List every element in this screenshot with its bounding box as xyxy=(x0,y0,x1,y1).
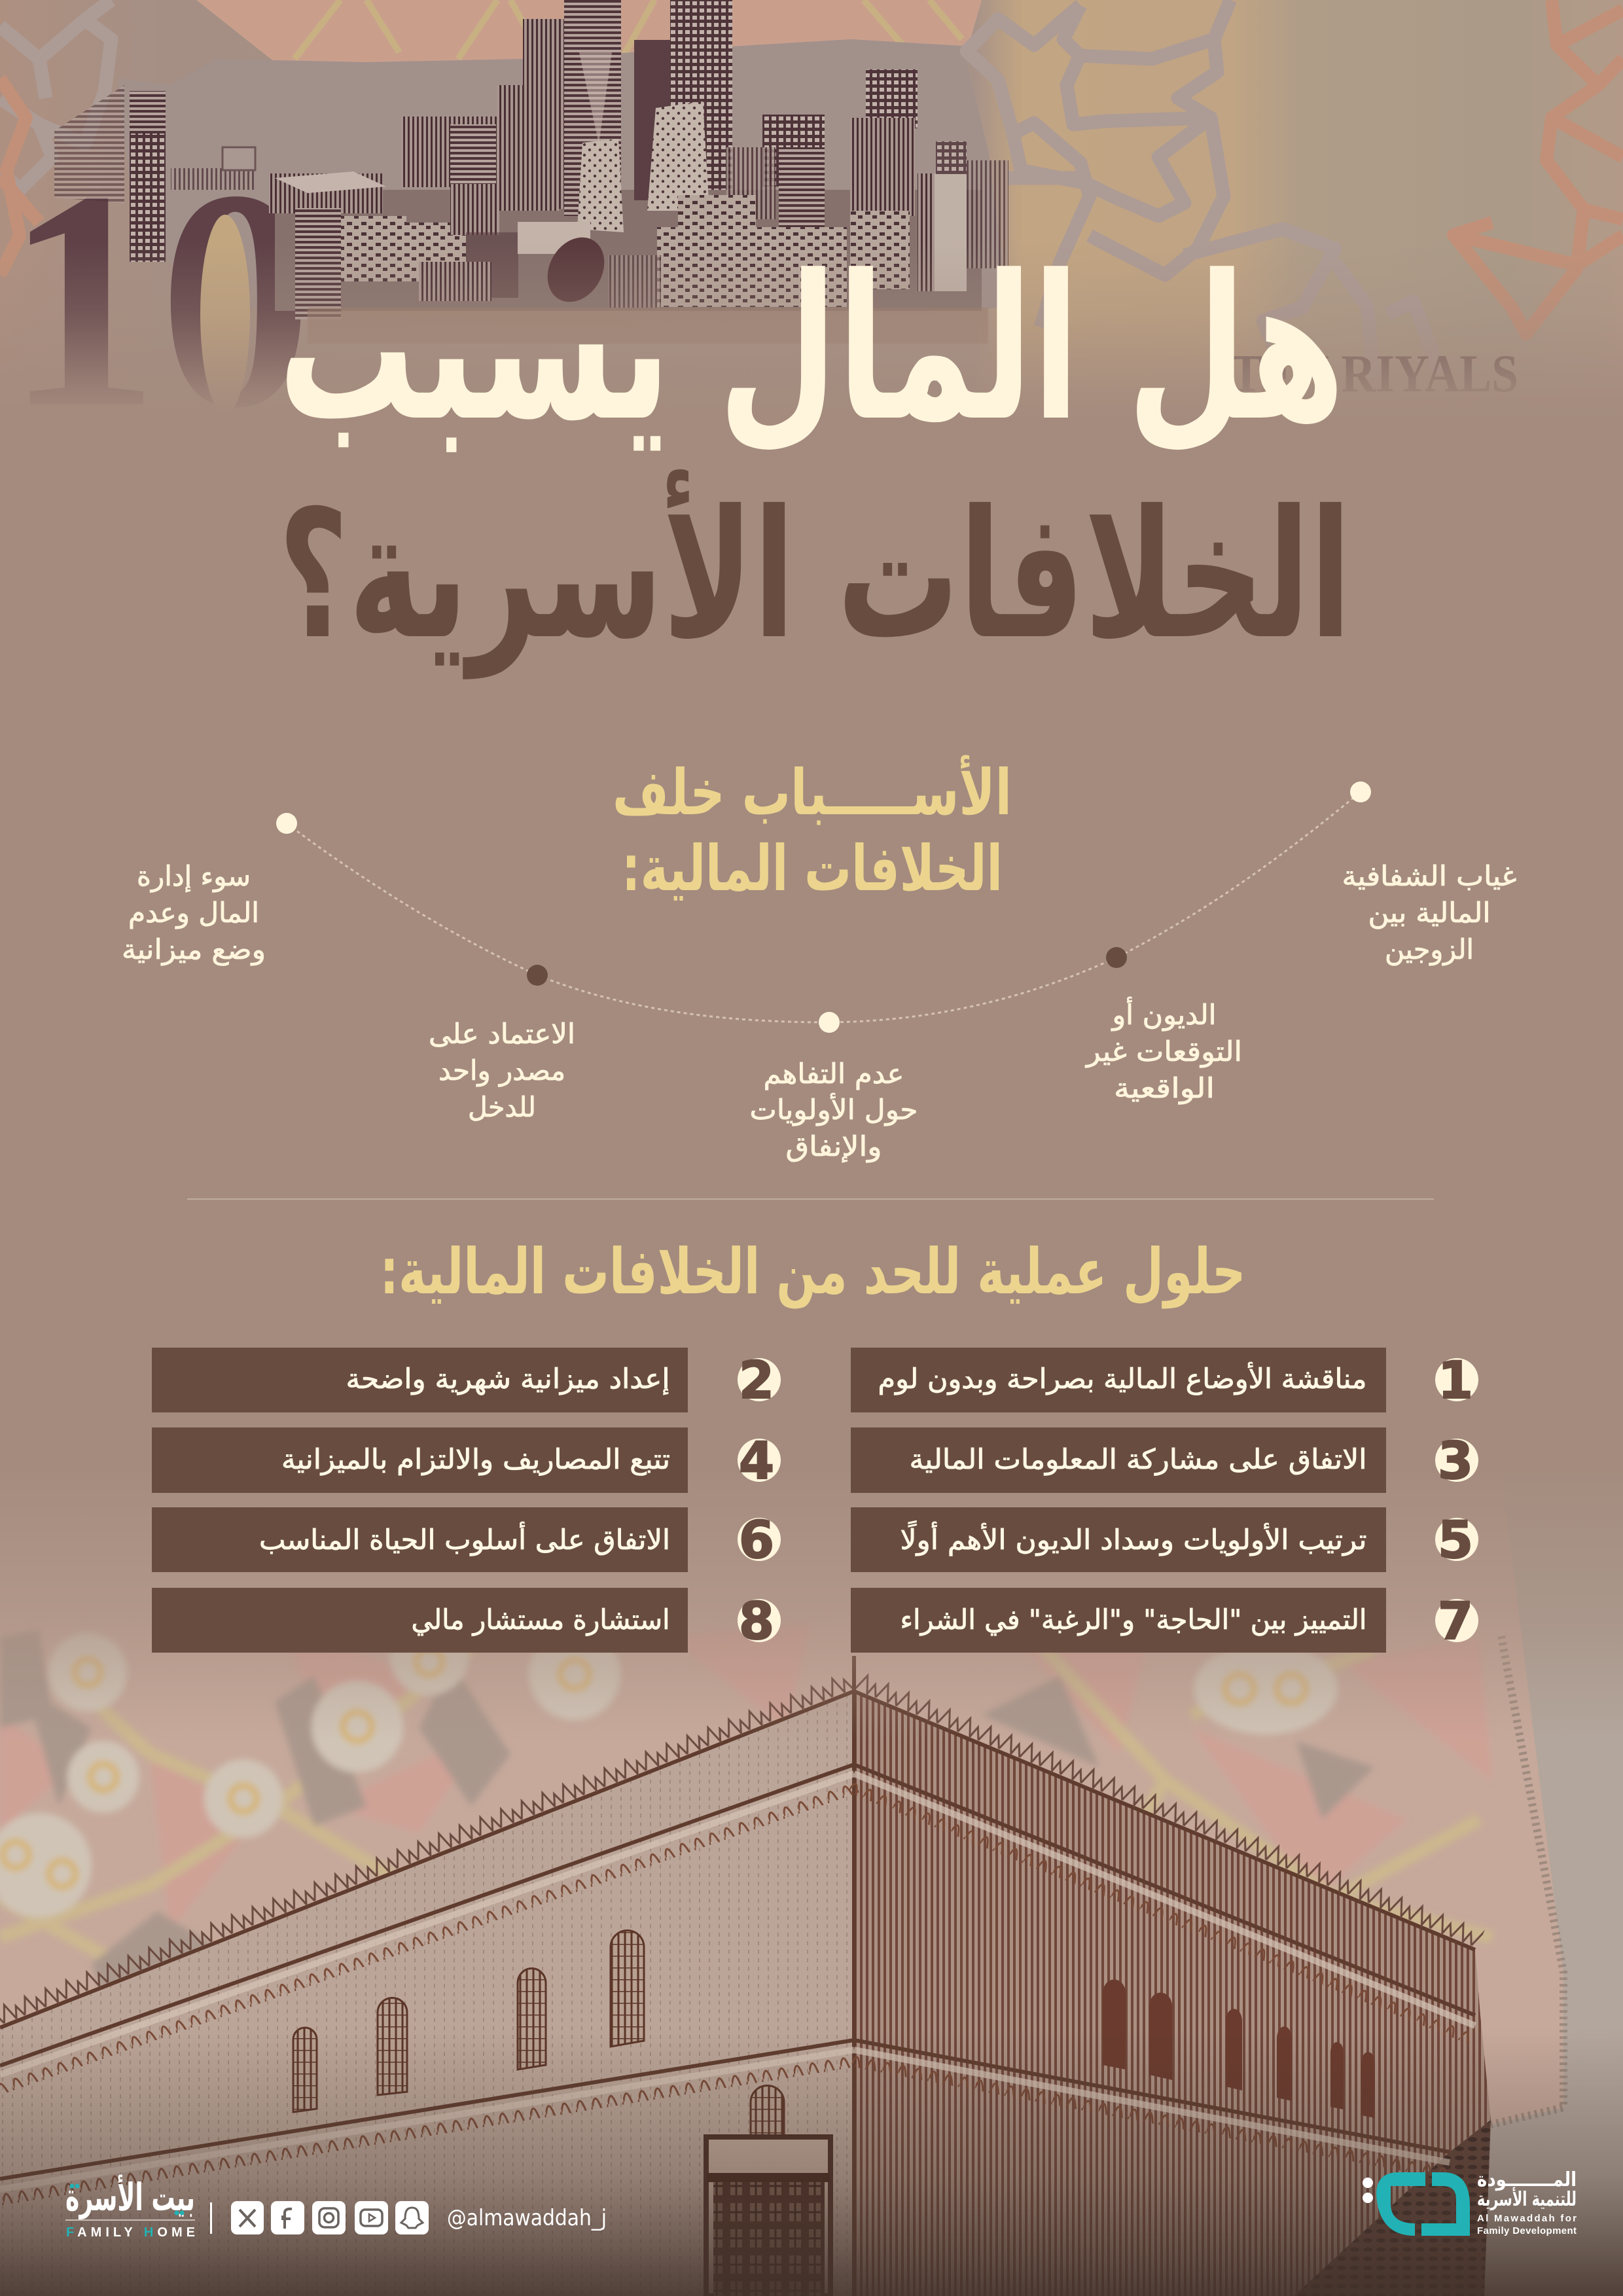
icon: Instagram xyxy=(312,2201,346,2234)
solution 6 xyxy=(152,1507,781,1572)
solution 6: الاتفاق على أسلوب الحياة المناسب xyxy=(259,1522,670,1556)
solution 5: 5 xyxy=(1438,1511,1473,1570)
cause: single income xyxy=(429,1018,575,1123)
section heading: causes xyxy=(613,755,1012,905)
cause: lack of transparency: المالية بين xyxy=(1368,897,1491,929)
social handle: @almawaddah_j xyxy=(447,2205,607,2231)
solution 3: الاتفاق على مشاركة المعلومات المالية xyxy=(910,1443,1366,1475)
icon: Facebook xyxy=(271,2201,304,2234)
icon: Snapchat xyxy=(395,2201,429,2234)
solution 3 xyxy=(851,1427,1478,1493)
solution 1: 1 xyxy=(1438,1352,1473,1410)
solution 7 xyxy=(851,1588,1478,1653)
logo: Family Home xyxy=(65,2174,195,2240)
logo: Al Mawaddah: للتنمية الأسرية xyxy=(1477,2187,1577,2211)
section heading: causes: الخلافات المالية: xyxy=(622,832,1003,905)
cause: poor money management xyxy=(122,860,266,966)
solution 8 xyxy=(152,1588,781,1653)
logo: Al Mawaddah: Family Development xyxy=(1477,2225,1577,2236)
causes curve xyxy=(276,781,1371,1033)
cause: lack of transparency: غياب الشفافية xyxy=(1342,860,1517,892)
logo: Family Home: بيت الأسرة xyxy=(65,2174,195,2220)
solution 5: ترتيب الأولويات وسداد الديون الأهم أولًا xyxy=(901,1520,1366,1556)
cause: misunderstanding: عدم التفاهم xyxy=(763,1058,904,1090)
cause: misunderstanding xyxy=(750,1058,918,1162)
section heading: causes: الأســـــباب خلف xyxy=(613,755,1012,829)
top banknote photo: Riyadh skyline xyxy=(0,0,1623,473)
social icons xyxy=(231,2201,429,2234)
logo: Al Mawaddah xyxy=(1363,2168,1577,2236)
cause: poor money management: المال وعدم xyxy=(128,897,259,929)
logo: Al Mawaddah: Al Mawaddah for xyxy=(1477,2213,1577,2224)
cause: poor money management: وضع ميزانية xyxy=(122,933,266,966)
big numeral 10: 10 xyxy=(5,126,313,473)
solution 1: مناقشة الأوضاع المالية بصراحة وبدون لوم xyxy=(878,1361,1366,1395)
cause: misunderstanding: والإنفاق xyxy=(785,1130,882,1162)
bottom banknote photo: historic palace xyxy=(0,1460,1623,2296)
solution 2 xyxy=(152,1348,781,1412)
title xyxy=(278,232,1351,681)
solution 6: 6 xyxy=(739,1511,774,1570)
solution 7: التمييز بين "الحاجة" و"الرغبة" في الشراء xyxy=(901,1604,1366,1636)
cause: lack of transparency: الزوجين xyxy=(1385,933,1474,965)
solution 8: استشارة مستشار مالي xyxy=(411,1604,670,1636)
logo: Family Home: F AMILY H OME xyxy=(66,2225,195,2240)
cause: single income: للدخل xyxy=(468,1091,536,1123)
solutions list xyxy=(152,1348,1478,1653)
cause: poor money management: سوء إدارة xyxy=(137,860,251,893)
cause: single income: مصدر واحد xyxy=(438,1054,565,1086)
cause: debts xyxy=(1085,997,1242,1104)
cause: debts: الديون أو xyxy=(1111,997,1216,1031)
solution 4: 4 xyxy=(739,1432,774,1491)
cause: misunderstanding: حول الأولويات xyxy=(750,1092,918,1126)
solution 2: إعداد ميزانية شهرية واضحة xyxy=(346,1363,670,1395)
solution 8: 8 xyxy=(739,1592,774,1651)
solution 1 xyxy=(851,1348,1478,1412)
solution 7: 7 xyxy=(1438,1592,1473,1651)
solution 2: 2 xyxy=(739,1352,774,1410)
icon: YouTube xyxy=(355,2201,388,2234)
solution 4 xyxy=(152,1427,781,1493)
cause: debts: التوقعات غير xyxy=(1085,1035,1242,1067)
solution 5 xyxy=(851,1507,1478,1572)
cause: lack of transparency xyxy=(1342,860,1517,965)
cause: single income: الاعتماد على xyxy=(429,1018,575,1050)
solution 3: 3 xyxy=(1438,1432,1473,1491)
TEN RIYALS banknote lettering: TEN RIYALS xyxy=(1230,344,1518,403)
solution 4: تتبع المصاريف والالتزام بالميزانية xyxy=(281,1443,670,1476)
logo: Al Mawaddah: المــــــــودة xyxy=(1477,2168,1577,2191)
section heading: solutions: حلول عملية للحد من الخلافات المالية: xyxy=(380,1235,1246,1309)
icon: X xyxy=(231,2201,264,2234)
cause: debts: الواقعية xyxy=(1114,1072,1215,1104)
